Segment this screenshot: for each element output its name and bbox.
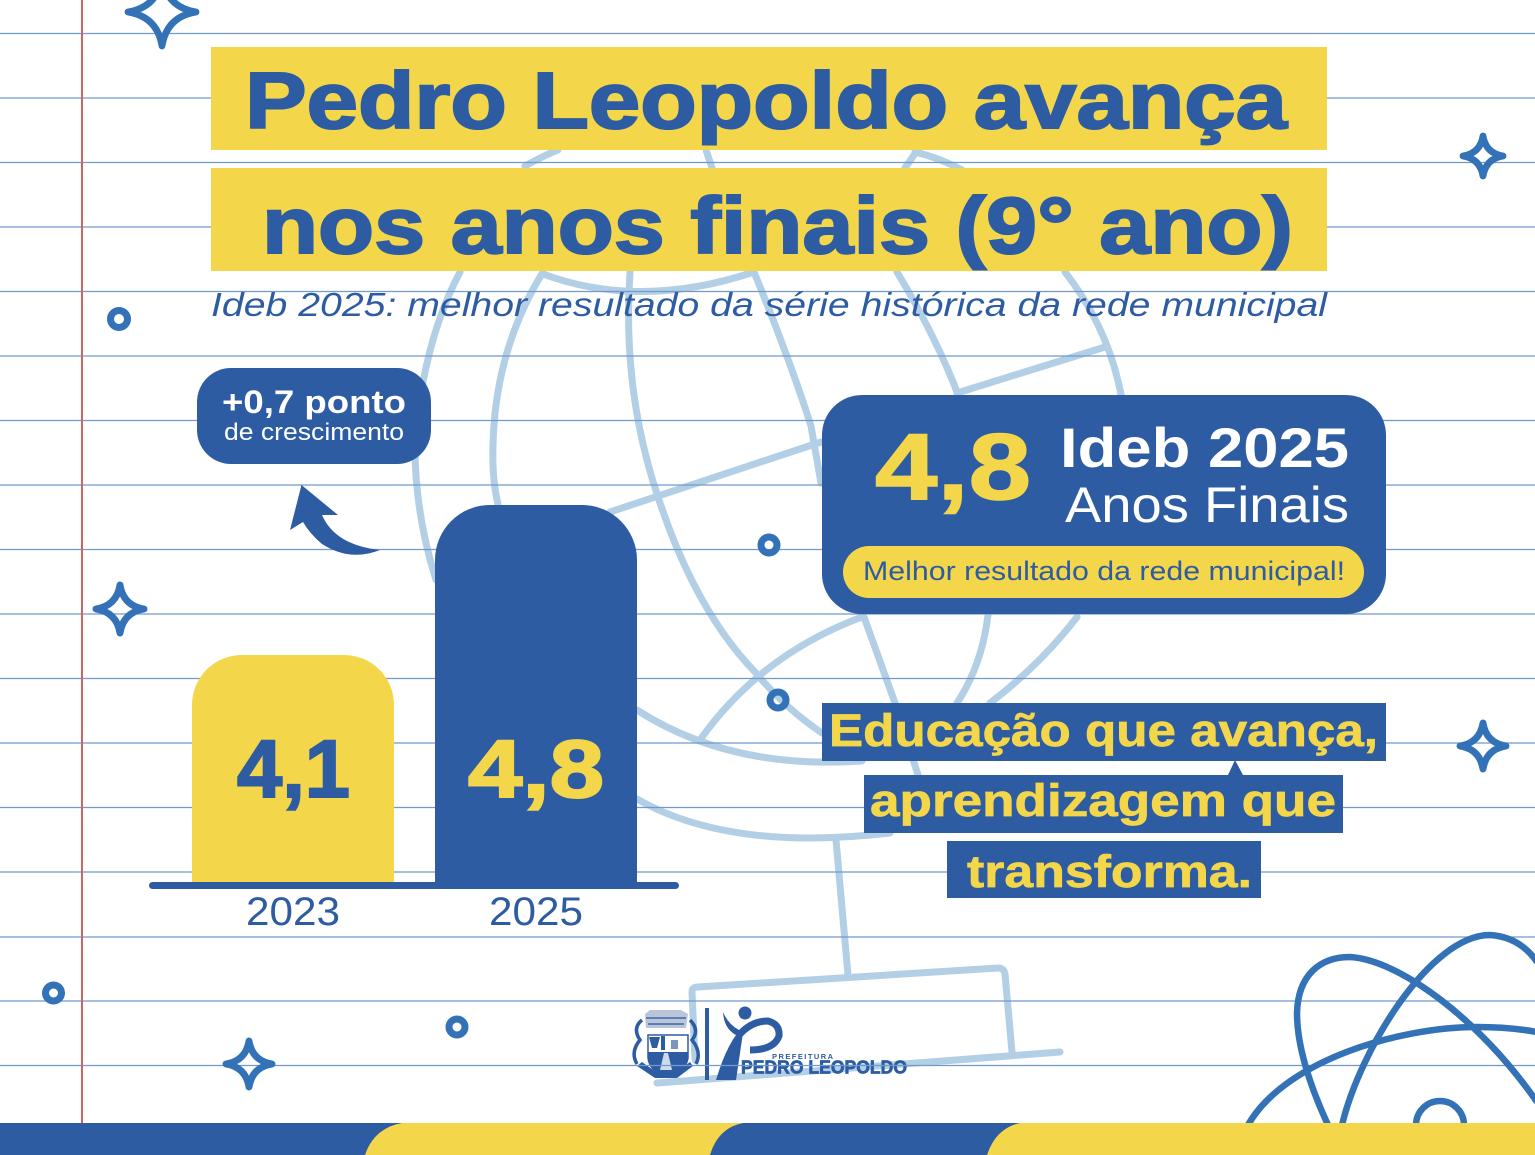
panel: Ideb 2025 result [822,395,1386,614]
icon: sparkle right upper [1463,136,1503,176]
title: Pedro Leopoldo avança [245,56,1288,145]
tagline: transforma. [967,846,1252,897]
icon: sparkle bottom [226,1041,272,1087]
icon: globe illustration [415,150,1122,1083]
title [211,47,1327,271]
icon: sparkle right lower [1460,723,1506,769]
bar 2025: 4,8 [468,724,604,815]
logo: Prefeitura de Pedro Leopoldo: PEDRO LEOPOLDO [741,1058,907,1078]
arrow [290,485,380,555]
icon: atom [1248,935,1535,1125]
pill: best result: Melhor resultado da rede municipal! [863,556,1345,586]
tagline: Educação que avança, [829,705,1378,756]
label 2025: 2025 [489,890,583,934]
label 2023: 2023 [246,890,340,934]
pill: best result [843,546,1364,598]
bar chart [149,505,679,934]
bar 2025 [435,505,637,883]
subtitle: Ideb 2025: melhor resultado da série histórica da rede municipal [211,286,1329,323]
logo: Prefeitura de Pedro Leopoldo [634,1006,907,1080]
icon: sparkle top [128,0,196,46]
callout: growth: de crescimento [224,419,404,446]
panel: Ideb 2025 result: Anos Finais [1065,477,1349,533]
chart axis [149,882,679,889]
tagline: aprendizagem que [870,775,1336,826]
bottom colour band [0,1123,1535,1155]
icon: municipal crest [634,1010,698,1078]
panel: Ideb 2025 result: 4,8 [875,414,1031,519]
callout: growth: +0,7 ponto [222,384,406,420]
bar 2023 [192,655,394,883]
panel: Ideb 2025 result: Ideb 2025 [1060,416,1349,479]
icon: sparkle left [96,585,144,633]
logo: Prefeitura de Pedro Leopoldo: PREFEITURA [772,1052,834,1061]
callout: growth [197,368,431,464]
tagline [822,703,1386,898]
title: nos anos finais (9° ano) [262,181,1293,270]
bar 2023: 4,1 [237,724,350,815]
decorative rings [46,310,786,1035]
